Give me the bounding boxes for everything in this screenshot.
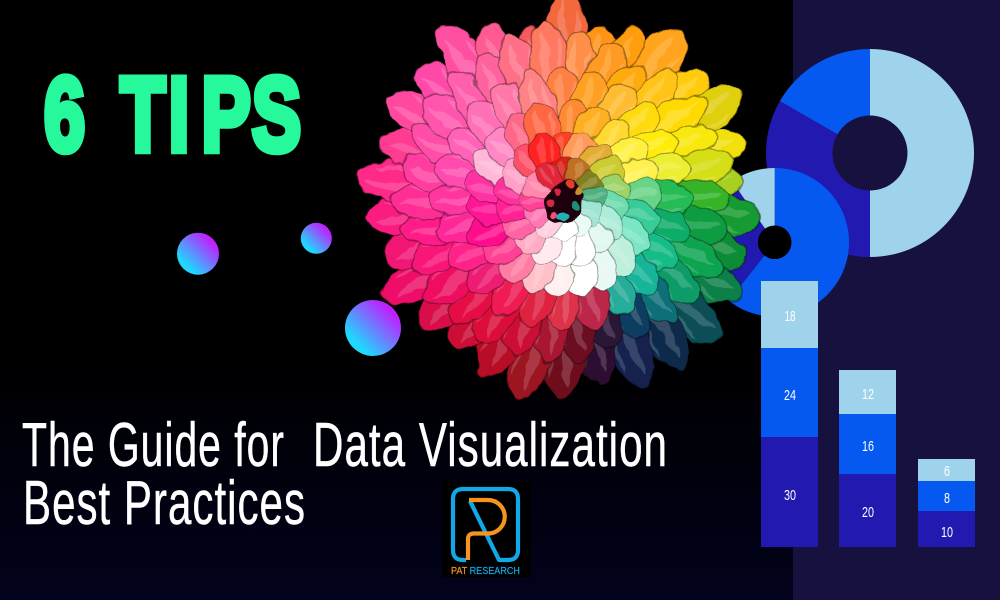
stacked bar chart xyxy=(761,281,975,547)
bar: third column: 10 xyxy=(941,524,953,541)
small donut chart xyxy=(700,168,849,317)
decorative orb: middle xyxy=(301,223,332,254)
bar: first column xyxy=(761,281,818,547)
heading: the guide for data visualization best practices: Best Practices xyxy=(23,469,306,538)
flower illustration xyxy=(352,0,764,403)
bar: second column: 16 xyxy=(862,438,874,455)
heading: the guide for data visualization best practices: The Guide for xyxy=(22,411,285,480)
bar: third column xyxy=(918,459,975,547)
heading: the guide for data visualization best practices: Data Visualization xyxy=(313,411,668,480)
bar: second column: 12 xyxy=(862,386,874,403)
bar: first column: 18 xyxy=(784,308,796,325)
decorative orb: left xyxy=(177,233,219,275)
bar: third column: 6 xyxy=(944,463,950,480)
bar: second column: 20 xyxy=(862,504,874,521)
bar: first column: 30 xyxy=(784,487,796,504)
title: 6 TIPS: 6 TIPS xyxy=(44,57,301,174)
bar: first column: 24 xyxy=(784,387,796,404)
large donut chart xyxy=(766,49,974,257)
decorative orb: large xyxy=(345,300,401,356)
panel: right navy column xyxy=(793,0,1000,600)
logo: PAT Research xyxy=(442,482,531,577)
logo: PAT Research: PAT RESEARCH xyxy=(451,566,520,577)
bar: third column: 8 xyxy=(944,490,950,507)
heading: the guide for data visualization best practices xyxy=(22,411,668,538)
bar: second column xyxy=(839,370,896,547)
